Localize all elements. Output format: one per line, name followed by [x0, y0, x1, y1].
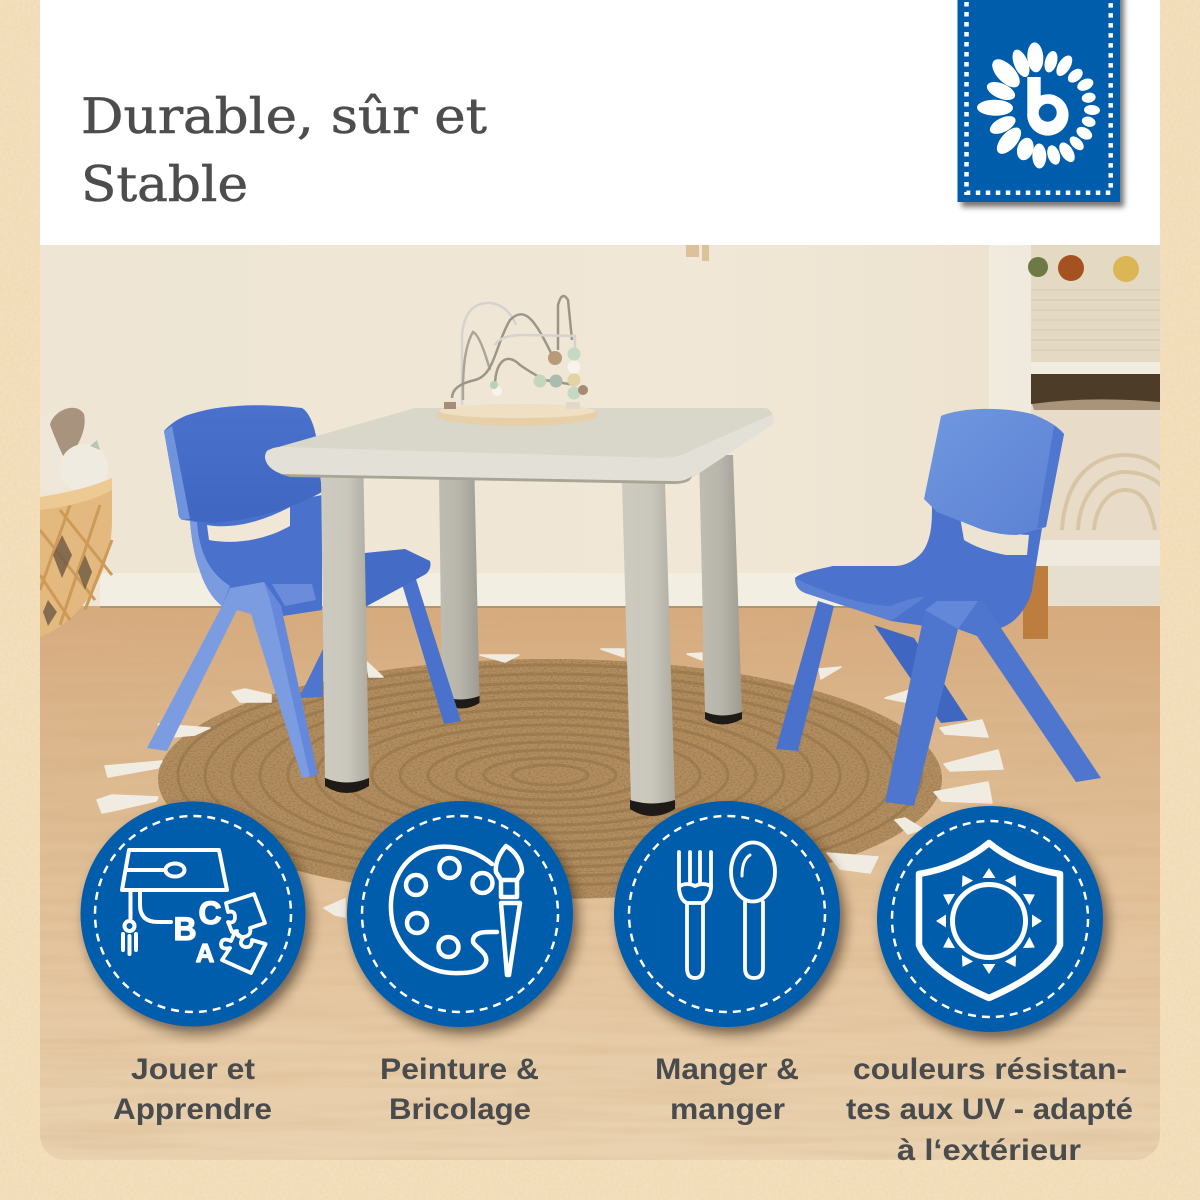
badge: painting and crafts: [347, 801, 573, 1027]
icon: shield with sun: [919, 843, 1060, 998]
wall hook: [686, 245, 709, 261]
bead maze toy: [436, 296, 598, 426]
label: eating: Manger &: [655, 1053, 799, 1086]
icon: palette and brush: [391, 846, 522, 975]
icon: fork and spoon: [679, 842, 775, 978]
baseboard: [100, 573, 844, 606]
icon: graduation cap, letters and puzzle: B: [173, 911, 197, 947]
title: [81, 88, 487, 213]
right blue chair: [776, 409, 1101, 806]
floor: [40, 606, 1160, 1166]
title: Durable, sûr et: [81, 88, 487, 145]
white header panel: [40, 0, 1160, 246]
label: play and learn: [113, 1053, 272, 1126]
label: UV resistant colours: tes aux UV - adapté: [846, 1093, 1133, 1126]
label: UV resistant colours: couleurs résistan-: [853, 1053, 1127, 1086]
room photo: [30, 245, 1165, 1166]
label: eating: manger: [670, 1093, 785, 1126]
badge: eating: [614, 801, 840, 1027]
table top: [265, 408, 773, 484]
rug tassels: [97, 649, 1003, 917]
jute rug: [150, 650, 950, 905]
wall: [40, 245, 1160, 610]
label: UV resistant colours: [846, 1053, 1133, 1167]
icon: graduation cap, letters and puzzle: A: [196, 938, 215, 968]
label: UV resistant colours: à l‘extérieur: [897, 1134, 1081, 1167]
shelf unit: [989, 245, 1165, 639]
table back legs: [439, 455, 742, 724]
icon: graduation cap, letters and puzzle: [122, 850, 266, 973]
icon: graduation cap, letters and puzzle: C: [198, 895, 222, 931]
label: play and learn: Apprendre: [113, 1093, 272, 1126]
left blue chair: [147, 405, 461, 778]
brand logo tag: [958, 0, 1120, 202]
label: painting and crafts: Bricolage: [389, 1093, 531, 1126]
badge: play and learn: [80, 802, 306, 1026]
title: Stable: [81, 156, 248, 213]
label: painting and crafts: [380, 1053, 539, 1126]
table front legs: [321, 476, 675, 816]
label: painting and crafts: Peinture &: [380, 1053, 539, 1086]
label: eating: [655, 1053, 799, 1126]
label: play and learn: Jouer et: [131, 1053, 255, 1086]
badge: UV resistant colours: [877, 806, 1103, 1032]
wicker basket with plush toys: [40, 408, 114, 637]
